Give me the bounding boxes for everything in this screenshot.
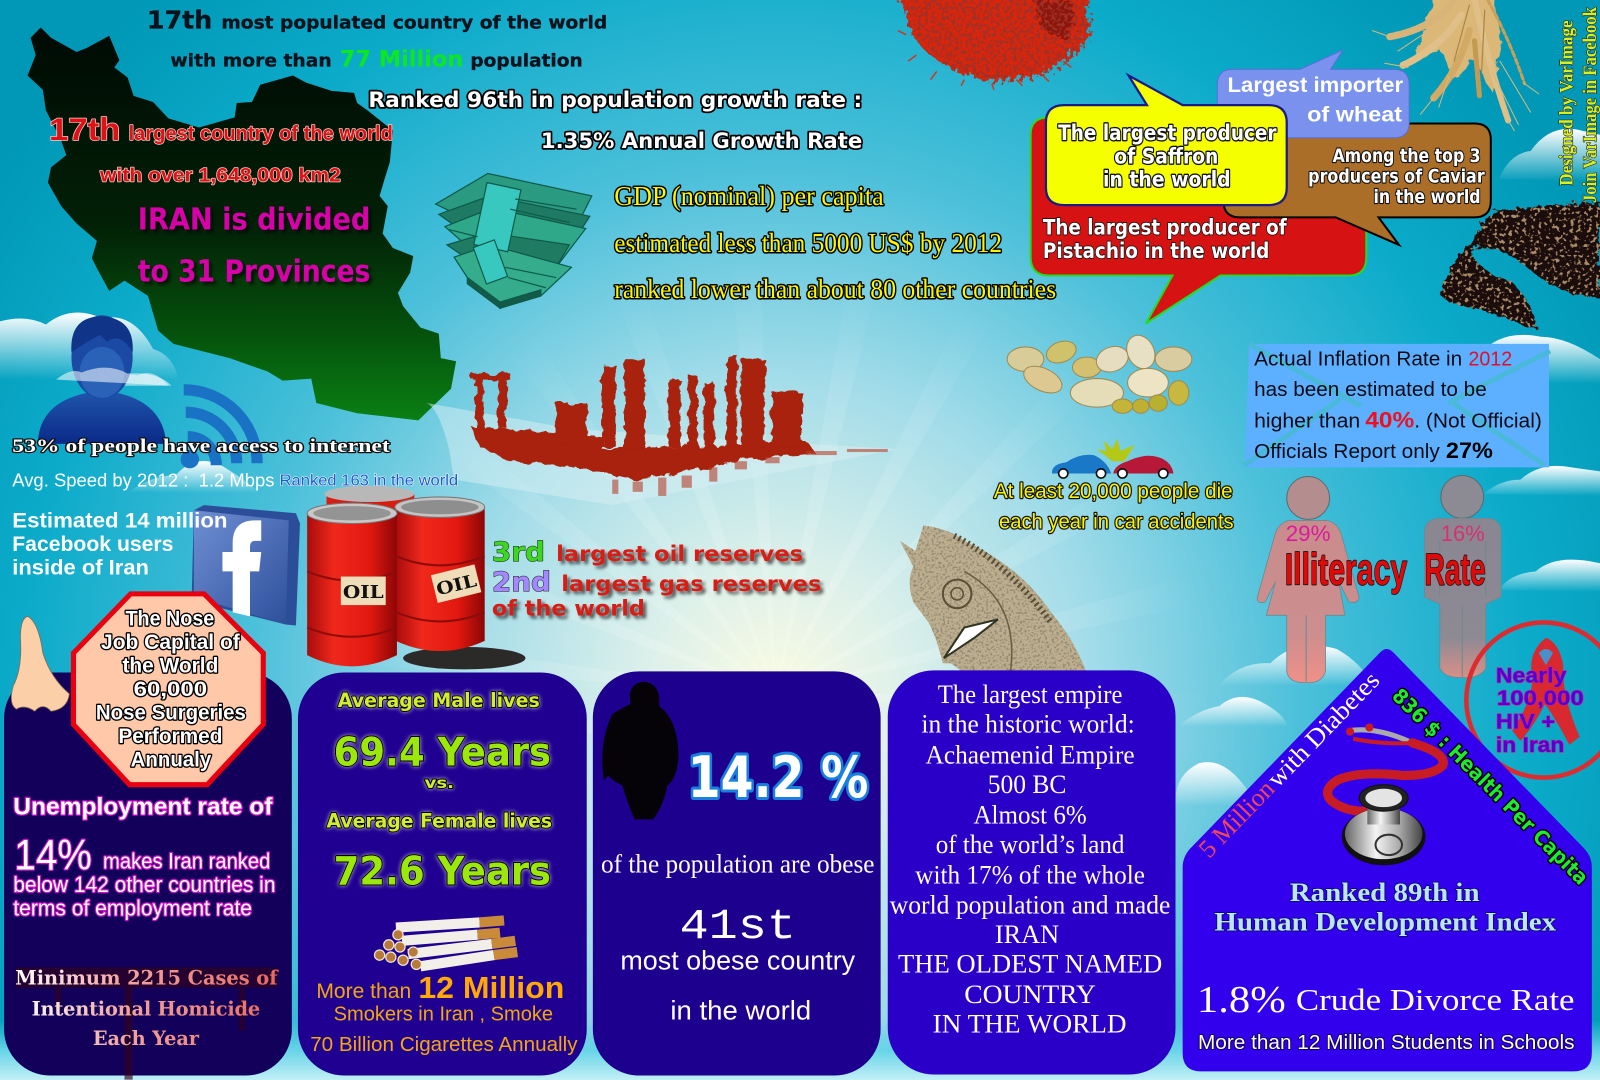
empire text: 500 BC	[988, 769, 1066, 799]
heading: most populated	[147, 6, 607, 72]
text: wheat importer: Largest importer	[1228, 73, 1403, 97]
icon: HIV circle	[1466, 622, 1600, 778]
inflation text: 40%	[1365, 408, 1414, 433]
unemployment text: terms of employment rate	[13, 895, 252, 920]
homicide text: Minimum 2215 Cases of	[15, 967, 279, 990]
icon: HIV circle: in Iran	[1496, 733, 1564, 757]
text: internet	[12, 436, 458, 491]
speech bubble: saffron	[1046, 76, 1287, 205]
inflation text: 2012	[1468, 348, 1512, 370]
unemployment text: Unemployment rate of	[13, 793, 273, 820]
text: caviar	[1308, 146, 1485, 208]
diabetes roof text: 5 Million	[1193, 774, 1280, 863]
inflation text	[1254, 348, 1542, 463]
empire text: THE OLDEST NAMED	[898, 948, 1162, 978]
icon: oil barrels: OIL	[343, 583, 384, 603]
icon: HIV circle: HIV +	[1496, 710, 1555, 734]
text: internet: 53% of people have access to internet	[12, 436, 390, 457]
nose job text: Annualy	[131, 747, 211, 771]
text: caviar: in the world	[1373, 187, 1481, 208]
wheat	[1372, 0, 1539, 131]
text: GDP: GDP (nominal) per capita	[614, 180, 884, 211]
icon: stethoscope	[1328, 723, 1443, 865]
text: internet: Avg. Speed by 2012 : 1.2 Mbps	[12, 470, 274, 491]
inflation text: Actual Inflation Rate in	[1254, 348, 1462, 370]
empire text: world population and made	[890, 889, 1170, 919]
text: wheat importer	[1228, 73, 1403, 126]
text: provinces	[138, 203, 370, 290]
nose job text: 60,000	[134, 677, 207, 701]
life expectancy text: 69.4 Years	[334, 730, 551, 775]
panel: health house	[1183, 649, 1593, 1071]
inflation text: has been estimated to be	[1254, 379, 1487, 401]
life expectancy text: vs.	[424, 774, 454, 792]
icon: car crash	[1052, 439, 1173, 478]
text: oil and gas reserves: of the world	[492, 596, 645, 621]
inflation box	[1244, 344, 1550, 467]
text: GDP	[614, 180, 1056, 304]
homicide text	[15, 967, 279, 1050]
nose job text: The Nose	[126, 607, 214, 631]
text: car accidents: At least 20,000 people die	[994, 479, 1233, 503]
map of Iran	[28, 28, 456, 420]
icon: HIV circle: Nearly	[1496, 664, 1566, 688]
human development text	[1214, 877, 1557, 937]
text: oil and gas reserves	[492, 537, 821, 621]
nose job text: Nose Surgeries	[96, 700, 246, 724]
life expectancy text: Average Male lives	[338, 689, 540, 712]
icon: HIV circle: 100,000	[1497, 686, 1584, 710]
text: largest country	[49, 111, 393, 187]
text: wheat importer: of wheat	[1307, 102, 1402, 126]
text: oil and gas reserves: largest gas reserves	[561, 572, 821, 597]
text: GDP: estimated less than 5000 US$ by 2012	[614, 227, 1002, 258]
text: oil and gas reserves: 2nd	[492, 567, 551, 598]
nose job text: Job Capital of	[101, 630, 241, 654]
text: car accidents: each year in car accidents	[999, 510, 1234, 534]
human development text: Human Development Index	[1214, 907, 1557, 937]
icon: person online	[38, 315, 171, 444]
icon: cigarettes	[374, 920, 517, 969]
text: pistachio: Pistachio in the world	[1043, 239, 1269, 264]
speech bubble: wheat	[1217, 50, 1409, 138]
text: population growth: 1.35% Annual Growth Rate	[541, 129, 862, 154]
icon: money stack	[436, 173, 592, 308]
panel: Achaemenid empire	[888, 670, 1176, 1074]
text: caviar: Among the top 3	[1333, 146, 1481, 167]
smoking text: More than	[316, 979, 411, 1003]
students text: More than 12 Million Students in Schools	[1198, 1032, 1574, 1054]
text: saffron: The largest producer	[1058, 121, 1277, 146]
empire text: IN THE WORLD	[933, 1009, 1127, 1039]
text: oil and gas reserves: 3rd	[492, 537, 545, 568]
credit: vertical text	[1556, 7, 1600, 203]
text: population growth	[368, 88, 862, 154]
text: population growth: Ranked 96th in population growth rate :	[368, 88, 862, 113]
homicide text: Intentional Homicide	[32, 997, 260, 1020]
nose job text: the World	[122, 653, 218, 677]
empire text: of the world’s land	[936, 829, 1124, 859]
icon: ruins of Persepolis	[427, 355, 898, 505]
text: provinces: to 31 Provinces	[138, 255, 370, 290]
life expectancy text	[327, 689, 552, 895]
life expectancy text: Average Female lives	[327, 810, 552, 833]
speech bubble: caviar	[1223, 123, 1491, 245]
heading: most populated: with more than	[170, 51, 332, 71]
text: car accidents	[994, 479, 1234, 534]
unemployment text: makes Iran ranked	[103, 848, 270, 873]
panel: life expectancy and smoking	[298, 672, 587, 1076]
empire text: COUNTRY	[964, 979, 1096, 1009]
text: GDP: ranked lower than about 80 other countries	[614, 273, 1056, 304]
text: illiteracy rate: Rate	[1424, 544, 1486, 595]
inflation text: Officials Report only	[1254, 441, 1441, 463]
text: illiteracy rate	[1285, 521, 1486, 595]
icon: female figure	[1257, 477, 1359, 683]
divorce rate text: 1.8%	[1197, 979, 1286, 1021]
obesity text	[601, 848, 874, 1025]
heading: most populated: population	[470, 51, 583, 71]
icon: facebook	[192, 505, 300, 626]
icon: horse sculpture	[900, 526, 1087, 673]
obesity text: in the world	[670, 995, 811, 1025]
empire text: in the historic world:	[921, 709, 1135, 739]
empire text: The largest empire	[938, 679, 1122, 709]
empire text: Almost 6%	[973, 799, 1087, 829]
smoking text: Smokers in Iran , Smoke	[334, 1003, 553, 1025]
text: largest country: largest country of the world	[129, 123, 393, 145]
text: illiteracy rate: Illiteracy	[1285, 544, 1407, 595]
obesity text: most obese country	[620, 945, 856, 975]
text: illiteracy rate: 29%	[1286, 521, 1331, 546]
text: facebook users: inside of Iran	[12, 555, 149, 579]
pistachios	[1007, 331, 1192, 413]
empire text: Achaemenid Empire	[926, 739, 1135, 769]
text: largest country: with over 1,648,000 km2	[99, 165, 341, 187]
text: saffron	[1058, 121, 1277, 193]
text: saffron: in the world	[1103, 168, 1231, 193]
empire text	[890, 679, 1170, 1039]
homicide text: Each Year	[93, 1027, 200, 1050]
text: provinces: IRAN is divided	[138, 203, 370, 238]
blood drips	[15, 967, 278, 1080]
caviar	[1441, 202, 1600, 331]
icon: oil barrels	[307, 486, 526, 669]
heading: most populated: most populated country of the world	[221, 14, 607, 34]
text: pistachio: The largest producer of	[1043, 216, 1287, 241]
text: pistachio	[1043, 216, 1287, 264]
icon: male figure	[1424, 476, 1501, 678]
human development text: Ranked 89th in	[1290, 877, 1480, 907]
unemployment text	[13, 793, 276, 920]
icon: obese silhouette	[602, 682, 679, 819]
diabetes roof text	[1193, 666, 1385, 863]
text: facebook users: Facebook users	[12, 532, 174, 556]
smoking text: 12 Million	[418, 971, 564, 1005]
obesity text: 41st	[680, 902, 796, 951]
unemployment text: 14%	[14, 831, 92, 879]
text: oil and gas reserves: largest oil reserves	[556, 542, 803, 567]
text: facebook users	[12, 509, 228, 579]
obesity percentage: 14.2 %	[688, 745, 868, 811]
text: illiteracy rate: 16%	[1441, 521, 1485, 546]
octagon sign	[73, 594, 263, 785]
inflation text: higher than	[1254, 411, 1360, 433]
diabetes roof text: with Diabetes	[1261, 666, 1385, 793]
saffron pile	[898, 0, 1090, 90]
panel: unemployment	[4, 594, 292, 1080]
icon: oil barrels: OIL	[434, 571, 479, 600]
heading: most populated: 17th	[147, 6, 212, 35]
speech bubble: pistachio	[1031, 117, 1366, 323]
life expectancy text: 72.6 Years	[334, 850, 551, 895]
text: internet: Ranked 163 in the world	[280, 473, 458, 490]
empire text: IRAN	[995, 919, 1059, 949]
icon: nose	[11, 616, 69, 711]
text: facebook users: Estimated 14 million	[12, 509, 228, 533]
empire text: with 17% of the whole	[915, 860, 1145, 890]
obesity text: of the population are obese	[601, 848, 874, 878]
icon: wifi signal	[181, 390, 257, 468]
text: caviar: producers of Caviar	[1308, 167, 1485, 188]
text: saffron: of Saffron	[1114, 144, 1218, 169]
smoking text	[310, 971, 578, 1056]
divorce rate text: Crude Divorce Rate	[1296, 983, 1574, 1017]
nose job text: Performed	[118, 724, 222, 748]
nose job text	[96, 607, 246, 771]
inflation text: 27%	[1446, 438, 1493, 463]
text: largest country: 17th	[49, 111, 120, 147]
credit: vertical text: Designed by VarImage	[1556, 20, 1577, 186]
heading: most populated: 77 Million	[340, 46, 463, 72]
divorce rate text	[1197, 979, 1574, 1021]
smoking text: 70 Billion Cigarettes Annually	[310, 1034, 578, 1056]
inflation text: . (Not Official)	[1414, 411, 1542, 433]
panel: obesity	[593, 671, 881, 1076]
unemployment text: below 142 other countries in	[13, 872, 276, 897]
